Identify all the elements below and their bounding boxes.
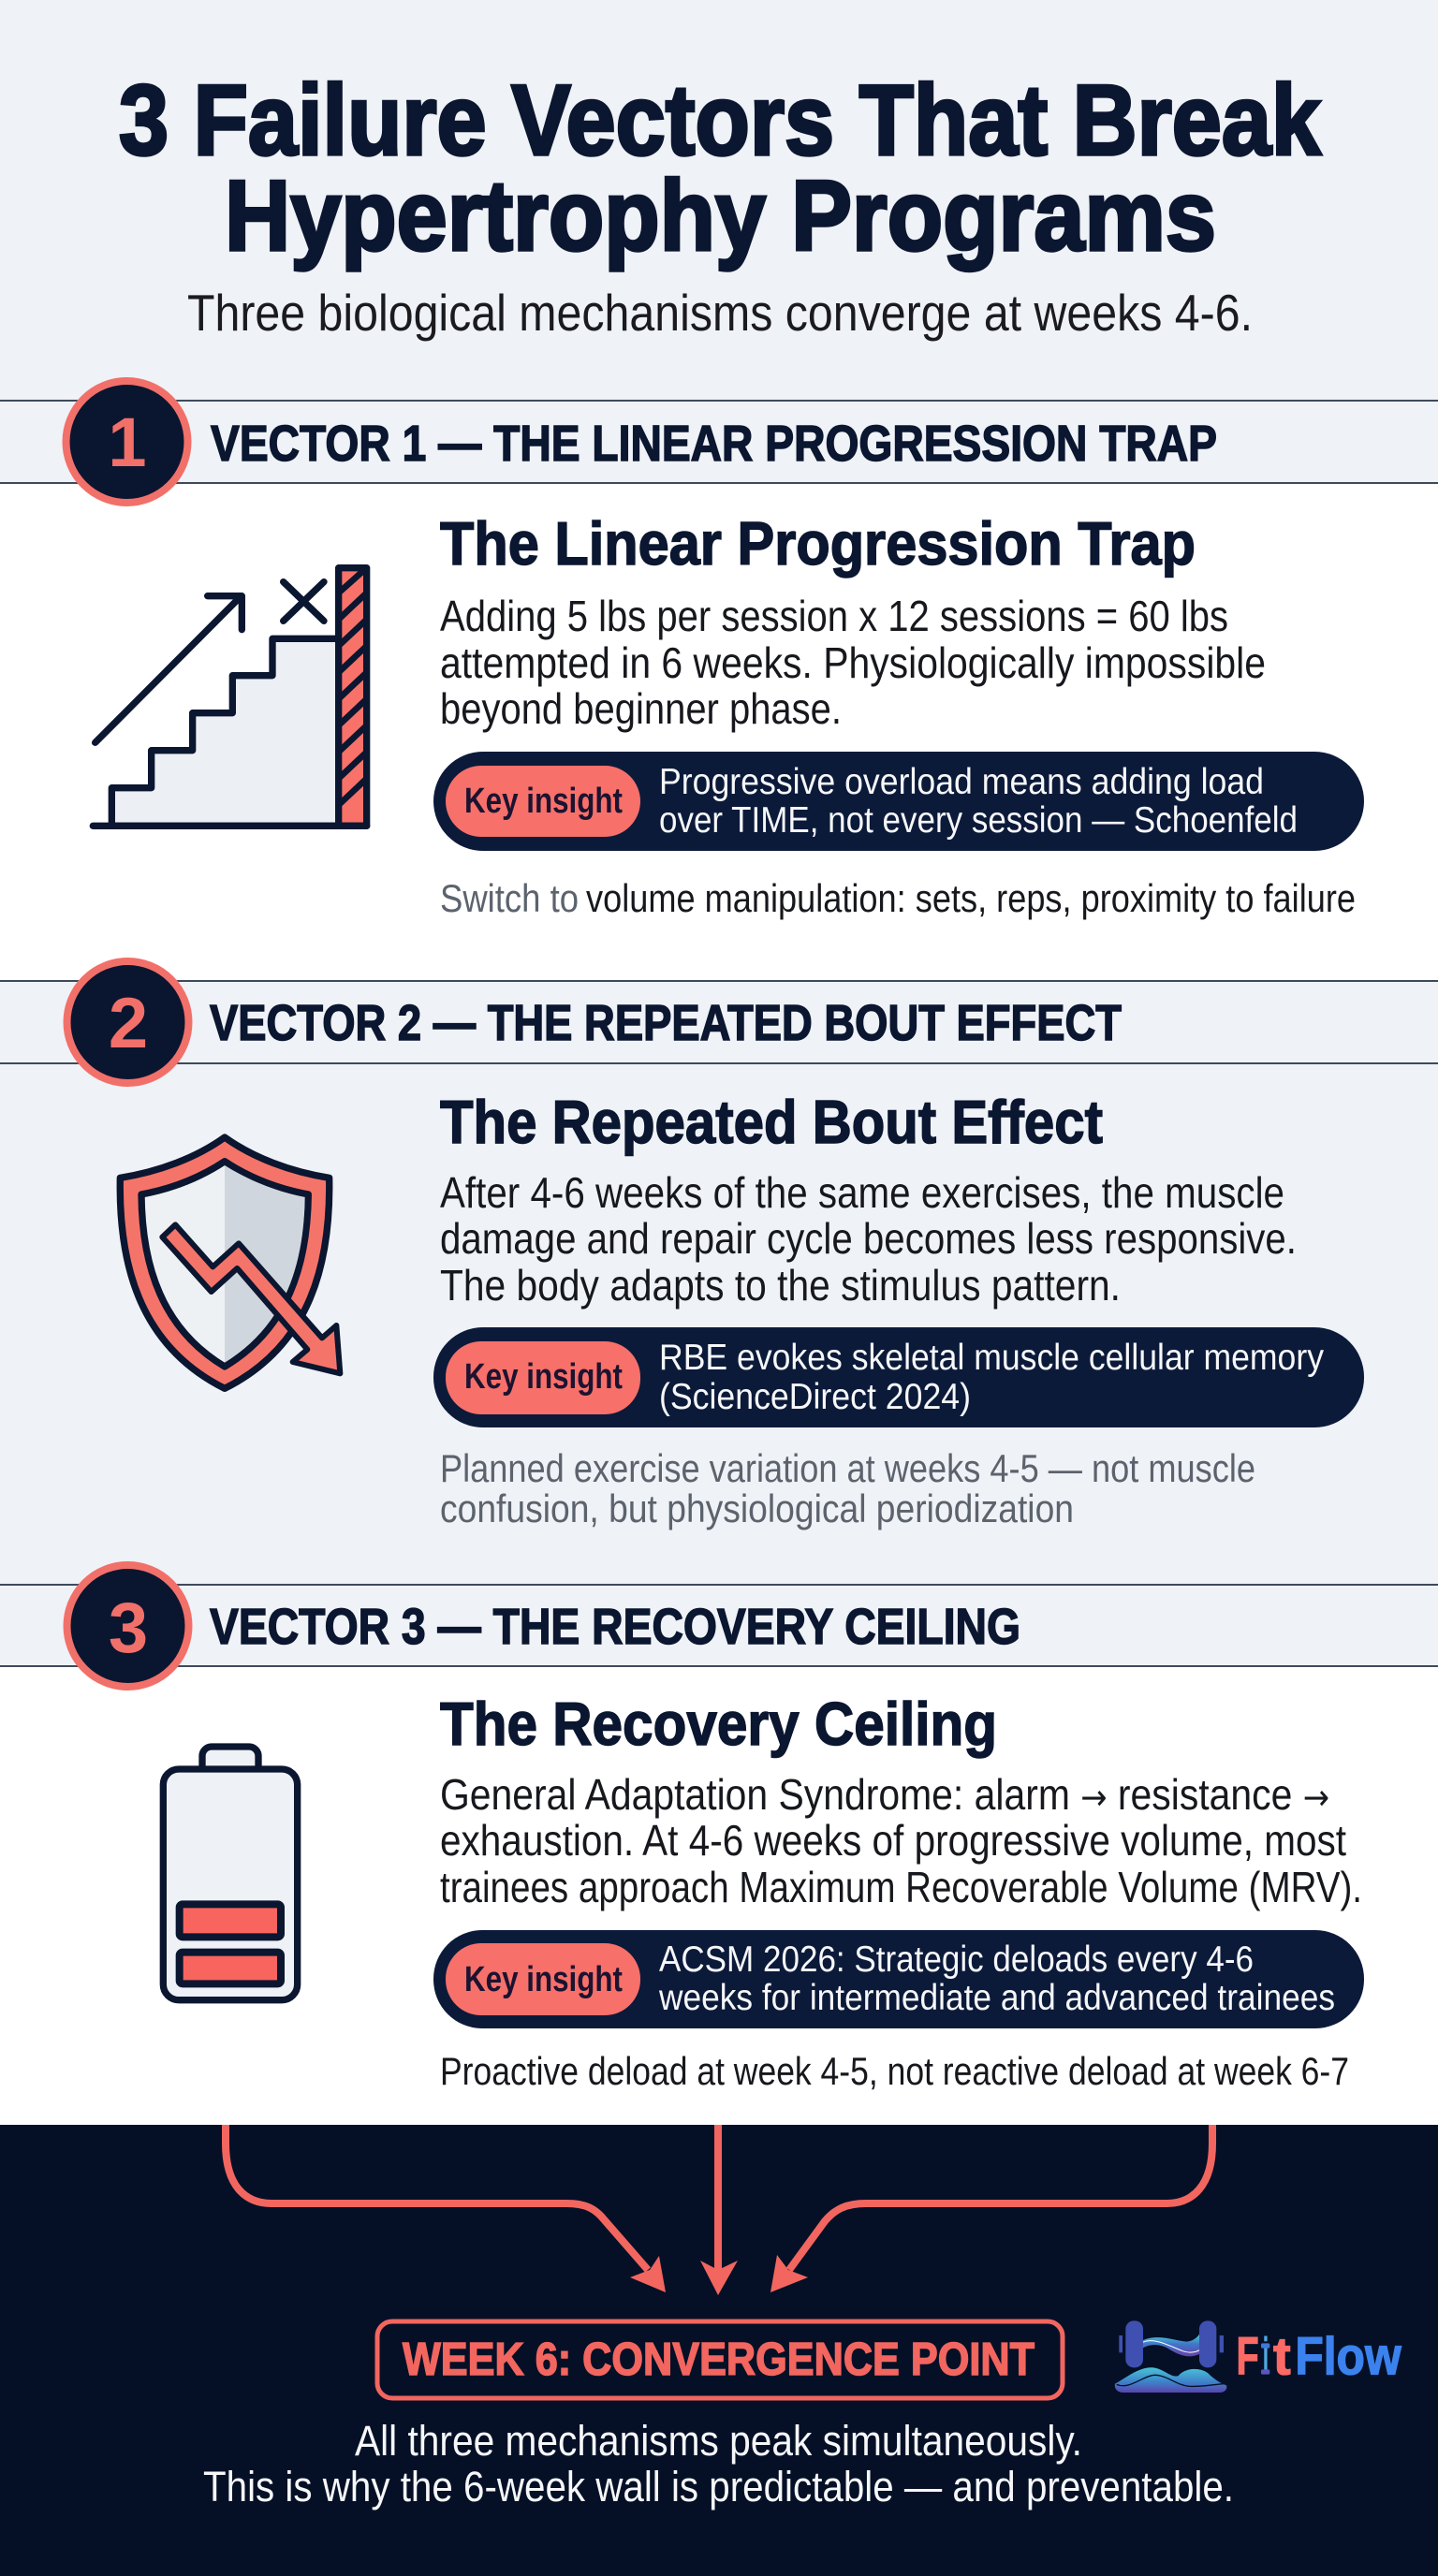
- panel: vector 1: [0, 381, 1438, 981]
- heading: The Repeated Bout Effect: [440, 1088, 1103, 1156]
- number badge 2: 2: [109, 984, 148, 1063]
- band: vector 1 heading: [0, 401, 1438, 483]
- body text: After 4-6 weeks of the same exercises, the muscle: [440, 1168, 1284, 1217]
- panel background: [0, 483, 1438, 981]
- body text: The body adapts to the stimulus pattern.: [440, 1261, 1121, 1310]
- band: vector 1 heading: VECTOR 1 — THE LINEAR PROGRESSION TRAP: [211, 416, 1217, 472]
- panel: vector 3: [0, 1565, 1438, 2125]
- callout: key insight: [433, 752, 1364, 851]
- convergence label: [377, 2321, 1063, 2398]
- band: vector 3 heading: VECTOR 3 — THE RECOVERY CEILING: [210, 1599, 1020, 1655]
- logo: FitFlow: F: [1237, 2328, 1259, 2387]
- panel: vector 2: [0, 961, 1438, 1530]
- body text: beyond beginner phase.: [440, 684, 842, 733]
- logo: FitFlow: Flow: [1295, 2328, 1401, 2387]
- callout: key insight: [433, 1327, 1364, 1427]
- convergence label: WEEK 6: CONVERGENCE POINT: [403, 2334, 1034, 2385]
- number badge 1: [66, 381, 187, 503]
- header: [119, 64, 1321, 342]
- logo: FitFlow: i: [1263, 2328, 1269, 2387]
- callout: key insight: ACSM 2026: Strategic deloads every 4-6: [659, 1939, 1254, 1980]
- body text: [440, 1770, 1362, 1911]
- body text: [440, 1168, 1297, 1310]
- panel background: [0, 1666, 1438, 2125]
- callout: key insight: over TIME, not every session — Schoenfeld: [659, 800, 1298, 841]
- action note: [440, 1446, 1255, 1530]
- callout: key insight: Key insight: [464, 782, 623, 821]
- title: [119, 64, 1321, 271]
- logo: FitFlow: [1115, 2320, 1401, 2393]
- icon: staircase hitting a wall: [93, 568, 367, 826]
- arrow: left vector: [226, 2125, 666, 2292]
- title: Hypertrophy Programs: [225, 159, 1216, 271]
- arrow: right vector: [770, 2125, 1212, 2292]
- body text: attempted in 6 weeks. Physiologically impossible: [440, 638, 1266, 687]
- icon: low battery: [163, 1747, 298, 2000]
- action note: Switch to: [440, 876, 579, 920]
- body text: Adding 5 lbs per session x 12 sessions = 60 lbs: [440, 592, 1228, 640]
- band: vector 2 heading: VECTOR 2 — THE REPEATED BOUT EFFECT: [210, 995, 1122, 1051]
- number badge 1: 1: [108, 403, 147, 481]
- arrow: middle vector: [700, 2125, 738, 2295]
- callout: key insight: weeks for intermediate and advanced trainees: [658, 1978, 1335, 2018]
- number badge 2: [67, 961, 189, 1083]
- title: 3 Failure Vectors That Break: [119, 64, 1321, 176]
- icon: shield with falling arrow: [120, 1137, 340, 1388]
- action note: confusion, but physiological periodization: [440, 1486, 1074, 1530]
- body text: damage and repair cycle becomes less responsive.: [440, 1214, 1297, 1263]
- number badge 3: 3: [109, 1588, 148, 1668]
- action note: Planned exercise variation at weeks 4-5 — not muscle: [440, 1446, 1255, 1490]
- panel: convergence footer: [0, 2125, 1438, 2576]
- heading: The Recovery Ceiling: [440, 1690, 997, 1758]
- callout: key insight: [433, 1930, 1364, 2028]
- callout: key insight: Key insight: [464, 1357, 623, 1397]
- body text: [440, 592, 1266, 733]
- closing message: This is why the 6-week wall is predictable — and preventable.: [203, 2463, 1234, 2510]
- closing message: All three mechanisms peak simultaneously.: [355, 2417, 1082, 2465]
- callout: key insight: Progressive overload means adding load: [659, 762, 1264, 802]
- subtitle: Three biological mechanisms converge at weeks 4-6.: [187, 284, 1253, 342]
- callout: key insight: Key insight: [464, 1960, 623, 1999]
- callout: key insight: (ScienceDirect 2024): [659, 1377, 971, 1417]
- callout: key insight: RBE evokes skeletal muscle cellular memory: [659, 1338, 1324, 1378]
- logo: FitFlow: t: [1273, 2328, 1291, 2387]
- body text: General Adaptation Syndrome: alarm → resistance →: [440, 1770, 1329, 1819]
- footer background: [0, 2125, 1438, 2576]
- closing message: [203, 2417, 1234, 2510]
- heading: The Linear Progression Trap: [440, 509, 1196, 578]
- number badge 3: [67, 1565, 189, 1687]
